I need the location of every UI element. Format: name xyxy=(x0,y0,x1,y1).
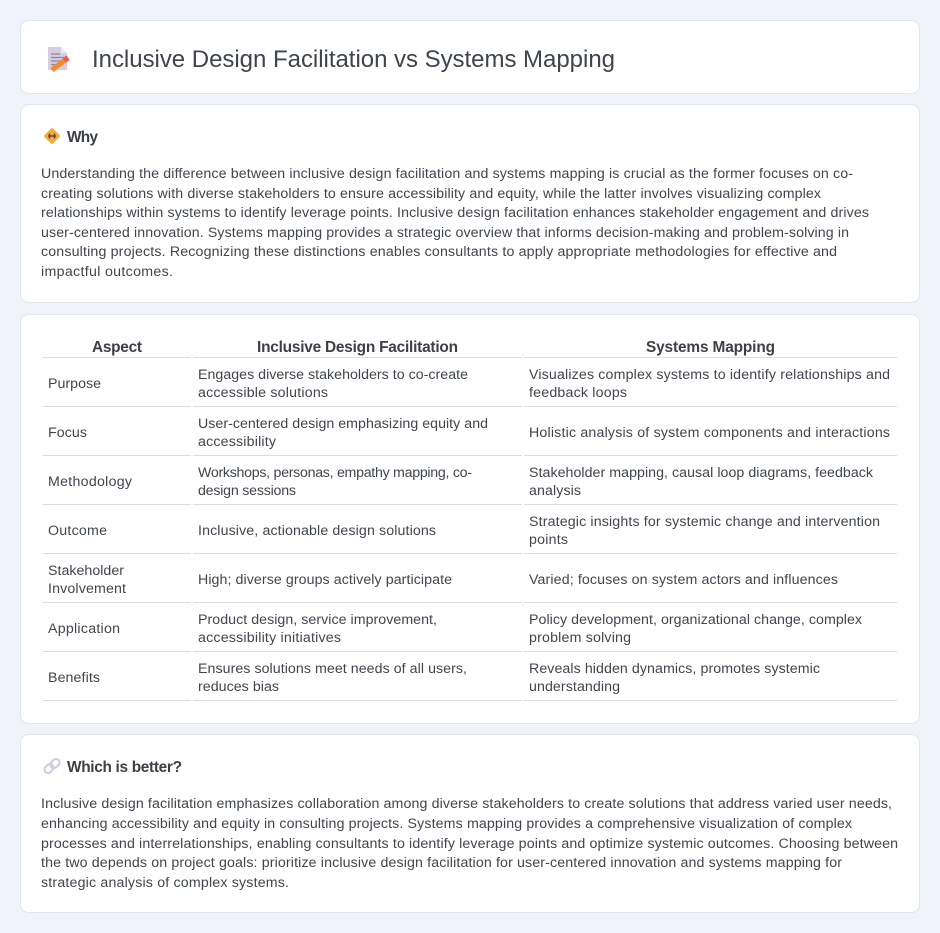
panel: which is better xyxy=(20,734,920,912)
text block: which is better paragraph xyxy=(41,796,898,891)
table row: benefits: Reveals hidden dynamics, promotes systemic xyxy=(529,661,820,677)
table row: outcome: points xyxy=(529,532,568,548)
table row: application xyxy=(43,612,897,652)
panel: comparison table xyxy=(20,314,920,724)
table row: benefits: Benefits xyxy=(48,670,100,686)
table row: outcome: Inclusive, actionable design solutions xyxy=(198,523,436,539)
table row: application: Product design, service improvement, xyxy=(198,612,437,628)
table row: application: accessibility initiatives xyxy=(198,630,341,646)
table row: methodology: Stakeholder mapping, causal loop diagrams, feedback xyxy=(529,465,874,481)
table row: benefits: Ensures solutions meet needs of all users, xyxy=(198,661,467,677)
table header row xyxy=(43,339,897,358)
table row: outcome xyxy=(43,514,897,554)
table row: outcome: Strategic insights for systemic change and intervention xyxy=(529,514,880,530)
table row: purpose: Visualizes complex systems to identify relationships and xyxy=(529,367,890,383)
table row: application: Policy development, organizational change, complex xyxy=(529,612,862,628)
table row: purpose: accessible solutions xyxy=(198,385,328,401)
table header row: Aspect xyxy=(92,339,142,356)
text block: why paragraph: creating solutions with diverse stakeholders to ensure accessibility and equity, while the latter involves visualizing complex xyxy=(41,186,821,202)
text block: why paragraph: relationships within systems to identify leverage points. Inclusive design facilitation enhances stakeholder engagement and drives xyxy=(41,205,869,221)
table row: methodology: Workshops, personas, empathy mapping, co- xyxy=(198,465,472,481)
table row: benefits: reduces bias xyxy=(198,679,279,695)
text block: why paragraph: Understanding the difference between inclusive design facilitation and systems mapping is crucial as the former focuses on co- xyxy=(41,166,853,182)
table row: stakeholder involvement xyxy=(43,563,897,603)
text block: why paragraph: consulting projects. Recognizing these distinctions enables consultants to apply appropriate methodologies for effective and xyxy=(41,244,837,260)
table row: focus xyxy=(43,416,897,456)
table row: purpose: feedback loops xyxy=(529,385,627,401)
text block: why paragraph xyxy=(41,166,869,280)
title: Inclusive Design Facilitation vs Systems Mapping xyxy=(92,46,615,73)
table row: methodology: design sessions xyxy=(198,483,296,499)
table row: application: problem solving xyxy=(529,630,631,646)
table row: benefits: understanding xyxy=(529,679,620,695)
table row: stakeholder involvement: Stakeholder xyxy=(48,563,124,579)
heading: why: Why xyxy=(67,129,98,146)
table row: application: Application xyxy=(48,621,120,637)
text block: why paragraph: impactful outcomes. xyxy=(41,264,173,280)
table row: focus: Holistic analysis of system components and interactions xyxy=(529,425,890,441)
table row: focus: accessibility xyxy=(198,434,277,450)
text block: which is better paragraph: Inclusive design facilitation emphasizes collaboration among diverse stakeholders to create solutions that address varied user needs, xyxy=(41,796,892,812)
text block: which is better paragraph: the two depends on project goals: prioritize inclusive design facilitation for user-centered innovation and systems mapping for xyxy=(41,855,842,871)
table row: outcome: Outcome xyxy=(48,523,107,539)
icon: memo with pencil xyxy=(48,47,68,70)
panel: title header xyxy=(20,20,920,94)
table row: purpose: Engages diverse stakeholders to co-create xyxy=(198,367,468,383)
table row: purpose xyxy=(43,367,897,407)
table row: stakeholder involvement: Varied; focuses on system actors and influences xyxy=(529,572,838,588)
table row: purpose: Purpose xyxy=(48,376,101,392)
table row: focus: User-centered design emphasizing equity and xyxy=(198,416,488,432)
text block: which is better paragraph: processes and interrelationships, enabling consultants to identify leverage points and optimize systemic outcomes. Choosing between xyxy=(41,836,898,852)
icon: chain link xyxy=(43,757,61,775)
text block: which is better paragraph: enhancing accessibility and equity in consulting projects. Systems mapping provides a comprehensive visualization of complex xyxy=(41,816,852,832)
table header row: Systems Mapping xyxy=(646,339,775,356)
table row: methodology: analysis xyxy=(529,483,581,499)
panel: why xyxy=(20,104,920,302)
table row: methodology: Methodology xyxy=(48,474,133,490)
heading: which is better: Which is better? xyxy=(67,759,182,776)
text block: why paragraph: user-centered innovation. Systems mapping provides a strategic overview that informs decision-making and problem-solving in xyxy=(41,225,849,241)
table header row: Inclusive Design Facilitation xyxy=(257,339,458,356)
icon: orange diamond sign xyxy=(44,128,60,144)
table row: focus: Focus xyxy=(48,425,87,441)
table row: benefits xyxy=(43,661,897,701)
table row: stakeholder involvement: High; diverse groups actively participate xyxy=(198,572,452,588)
table row: methodology xyxy=(43,465,897,505)
text block: which is better paragraph: strategic analysis of complex systems. xyxy=(41,875,289,891)
table row: stakeholder involvement: Involvement xyxy=(48,581,126,597)
